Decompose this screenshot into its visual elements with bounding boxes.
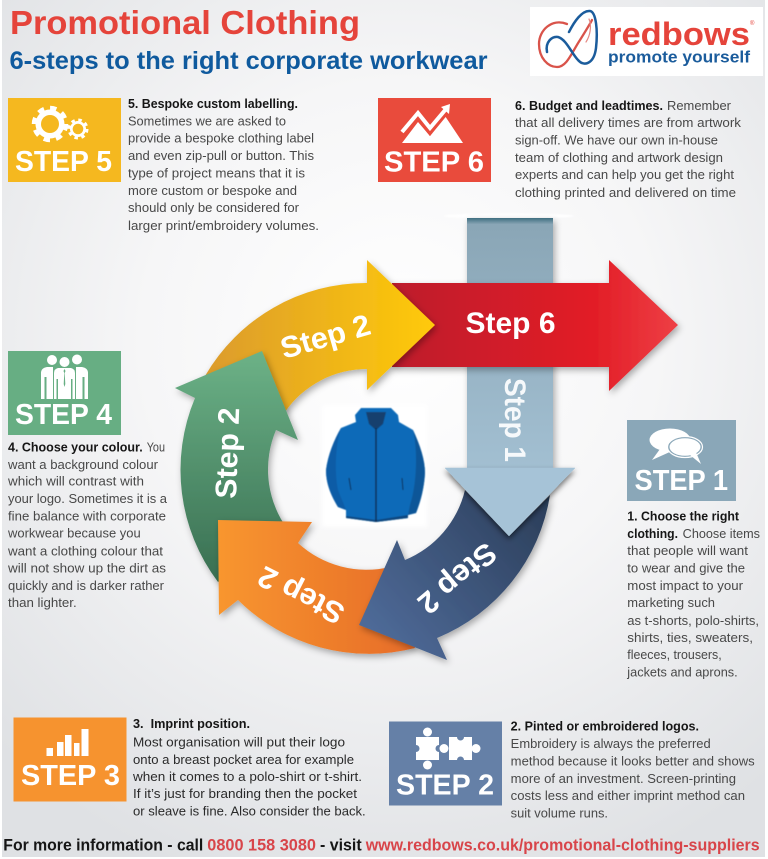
panel: step 2 [389,720,755,821]
panel: step 3 [14,717,366,819]
step 3 text: 3. Imprint position. [133,717,250,731]
footer contact line: www.redbows.co.uk/promotional-clothing-suppliers [365,837,760,855]
step 1 text: to wear and give the [627,562,745,576]
step 2 text: more of an investment. Screen-printing [511,772,736,786]
step 1 badge: STEP 1 [634,465,728,497]
arrow: orange step [218,520,415,654]
arrow label: step 1: Step 1 [498,378,531,462]
step 6 badge [378,98,491,182]
arrow label: yellow: Step 2 [277,309,374,366]
step 2 text [511,720,755,821]
step 4 text: want a clothing colour that [7,545,164,559]
step 6 text: clothing printed and delivered on time [515,186,736,200]
step 4 text: want a background colour [7,458,158,472]
step 6 text: Remember [667,99,731,113]
arrow: step 1 vertical shaft [444,214,574,470]
step 5 text [128,97,319,233]
step 2 badge: STEP 2 [396,769,494,801]
step 5 badge [8,98,121,182]
panel: step 5 [8,97,319,233]
step 1 text: most impact to your [627,579,743,593]
step 2 text: Embroidery is always the preferred [511,737,711,751]
step 1 text: fleeces, trousers, [627,648,722,662]
step 5 text: should only be considered for [128,201,299,215]
logo: redbows [530,7,763,76]
step 5 text: 5. Bespoke custom labelling. [128,97,298,111]
step 5 text: type of project means that it is [128,166,305,180]
arrow label: orange: Step 2 [253,559,350,630]
step 5 badge: STEP 5 [15,146,112,178]
step 6 text: sign-off. We have our own in-house [515,134,718,148]
step 2 text: suit volume runs. [511,807,608,821]
panel: step 6 [378,98,742,200]
step 1 badge [627,420,736,501]
step 1 text: shirts, ties, sweaters, [627,631,753,645]
subtitle: 6-steps to the right corporate workwear [10,47,488,75]
step 3 badge [14,718,126,802]
title: Promotional Clothing [10,4,360,41]
step 4 text: You [147,441,165,455]
step 4 text: will not show up the dirt as [7,562,166,576]
step 4 text: quickly and is darker rather [8,579,164,593]
logo tagline: promote yourself [608,48,750,66]
icon: blue jacket photo [322,405,427,527]
step 3 text [132,717,366,819]
step 4 text: 4. Choose your colour. [8,441,143,455]
step 4 text: your logo. Sometimes it is a [8,492,167,506]
step 2 text: 2. Pinted or embroidered logos. [511,720,699,734]
step 1 text: Choose items [683,527,760,541]
footer contact line: 0800 158 3080 [207,837,316,855]
step 3 badge: STEP 3 [21,760,120,792]
step 1 text: clothing. [627,527,678,541]
step 5 text: more custom or bespoke and [128,184,297,198]
logo registered mark: ® [750,20,755,27]
logo wordmark: redbows [608,16,750,52]
step 6 text: team of clothing and artwork design [515,151,723,165]
step 6 text: that all delivery times are from artwork [515,116,742,130]
arrow label: step 6: Step 6 [466,307,556,340]
arrow: step 1 head [445,468,575,536]
step 1 text: as t-shorts, polo-shirts, [627,614,759,628]
arrow label: dark blue: Step 2 [411,536,503,620]
step 3 text: when it comes to a polo-shirt or t-shirt. [132,770,362,784]
step 3 text: onto a breast pocket area for example [133,753,354,767]
step 5 text: larger print/embroidery volumes. [128,219,319,233]
icon: speech bubbles [650,428,702,464]
icon: gears [34,108,87,140]
step 1 text: that people will want [627,544,749,558]
step 6 text [515,99,742,200]
step 4 text [7,441,167,610]
arrow: dark blue step [359,490,550,660]
step 4 badge [8,351,121,435]
step 3 text: If it’s just for branding then the pocket [133,787,358,801]
step 3 text: or sleave is fine. Also consider the back. [133,805,366,819]
arrow label: green: Step 2 [210,407,246,499]
chart: process arrows diagram [175,214,678,660]
icon: infinity ribbon [539,11,597,67]
step 1 text: marketing such [627,596,715,610]
footer contact line [3,837,760,855]
step 2 text: costs less and either imprint method can [511,789,745,803]
icon: mountains and rising arrow [400,104,463,143]
icon: bar chart [46,729,88,756]
footer contact line: - visit [320,837,362,855]
step 4 text: which will contrast with [7,475,144,489]
step 2 text: method because it looks better and shows [511,755,755,769]
step 6 badge: STEP 6 [384,146,484,178]
step 4 text: fine balance with corporate [8,510,166,524]
step 5 text: provide a bespoke clothing label [128,132,314,146]
step 4 text: workwear because you [7,527,141,541]
step 5 text: and even zip-pull or button. This [128,149,314,163]
step 4 text: than lighter. [8,596,77,610]
step 4 badge: STEP 4 [15,399,112,431]
arrow: green step [175,351,298,582]
step 2 badge [389,722,502,806]
step 1 text: 1. Choose the right [627,510,740,524]
step 1 text: jackets and aprons. [626,666,738,680]
arrow: step 6 red [392,260,678,391]
panel: step 1 [626,420,760,680]
step 6 text: experts and can help you get the right [515,168,735,182]
footer contact line: For more information - call [3,837,203,855]
icon: business people [41,354,88,399]
step 5 text: Sometimes we are asked to [128,114,286,128]
step 1 text [626,510,760,680]
step 6 text: 6. Budget and leadtimes. [515,99,663,113]
panel: step 4 [7,351,167,610]
arrow: yellow step [205,260,435,412]
step 3 text: Most organisation will put their logo [133,736,345,750]
icon: puzzle pieces [412,728,480,770]
